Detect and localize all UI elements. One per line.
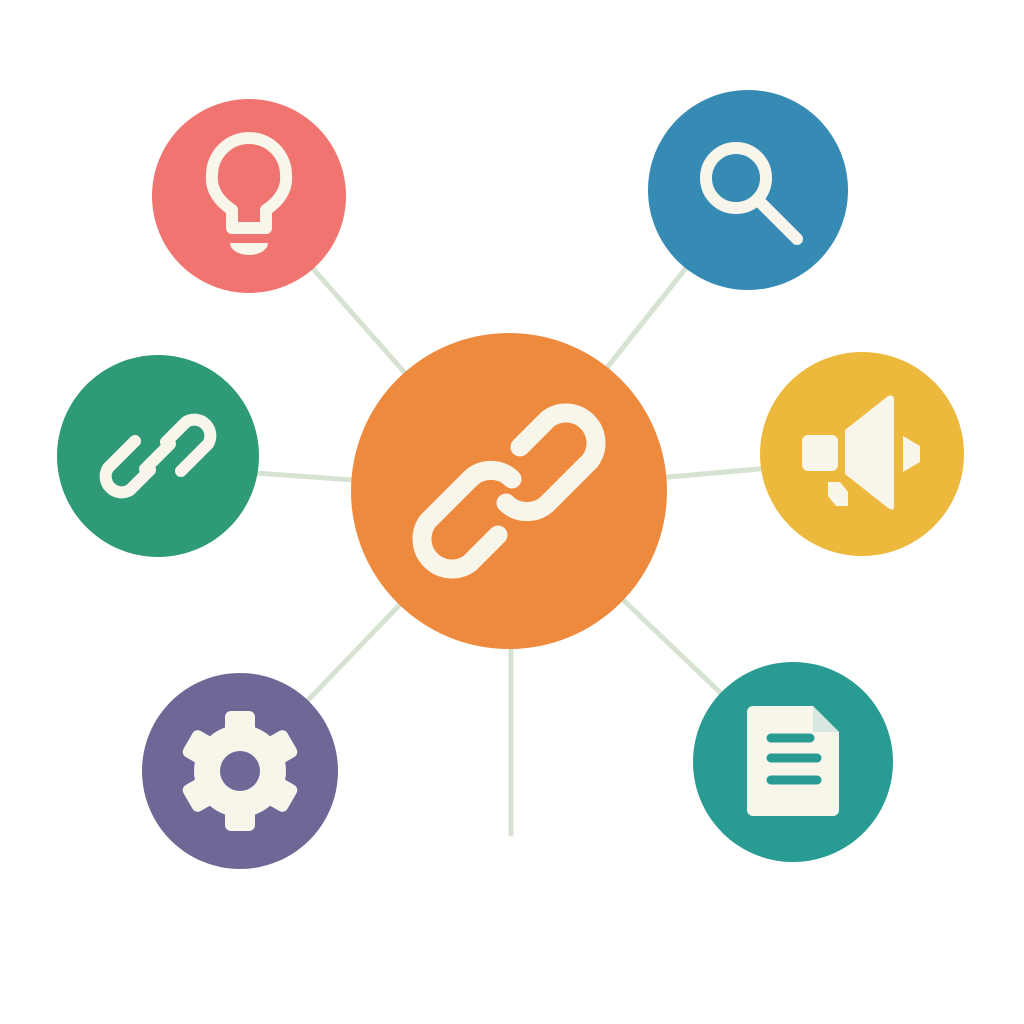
node: announcement (megaphone) xyxy=(760,352,964,556)
node: idea (lightbulb) xyxy=(152,99,346,293)
node: settings (gear) xyxy=(142,673,338,869)
node: link (chain) xyxy=(57,355,259,557)
node: search (magnifier) xyxy=(648,90,848,290)
center hub: link icon xyxy=(351,333,667,649)
connector lines xyxy=(158,190,862,834)
node: document xyxy=(693,662,893,862)
